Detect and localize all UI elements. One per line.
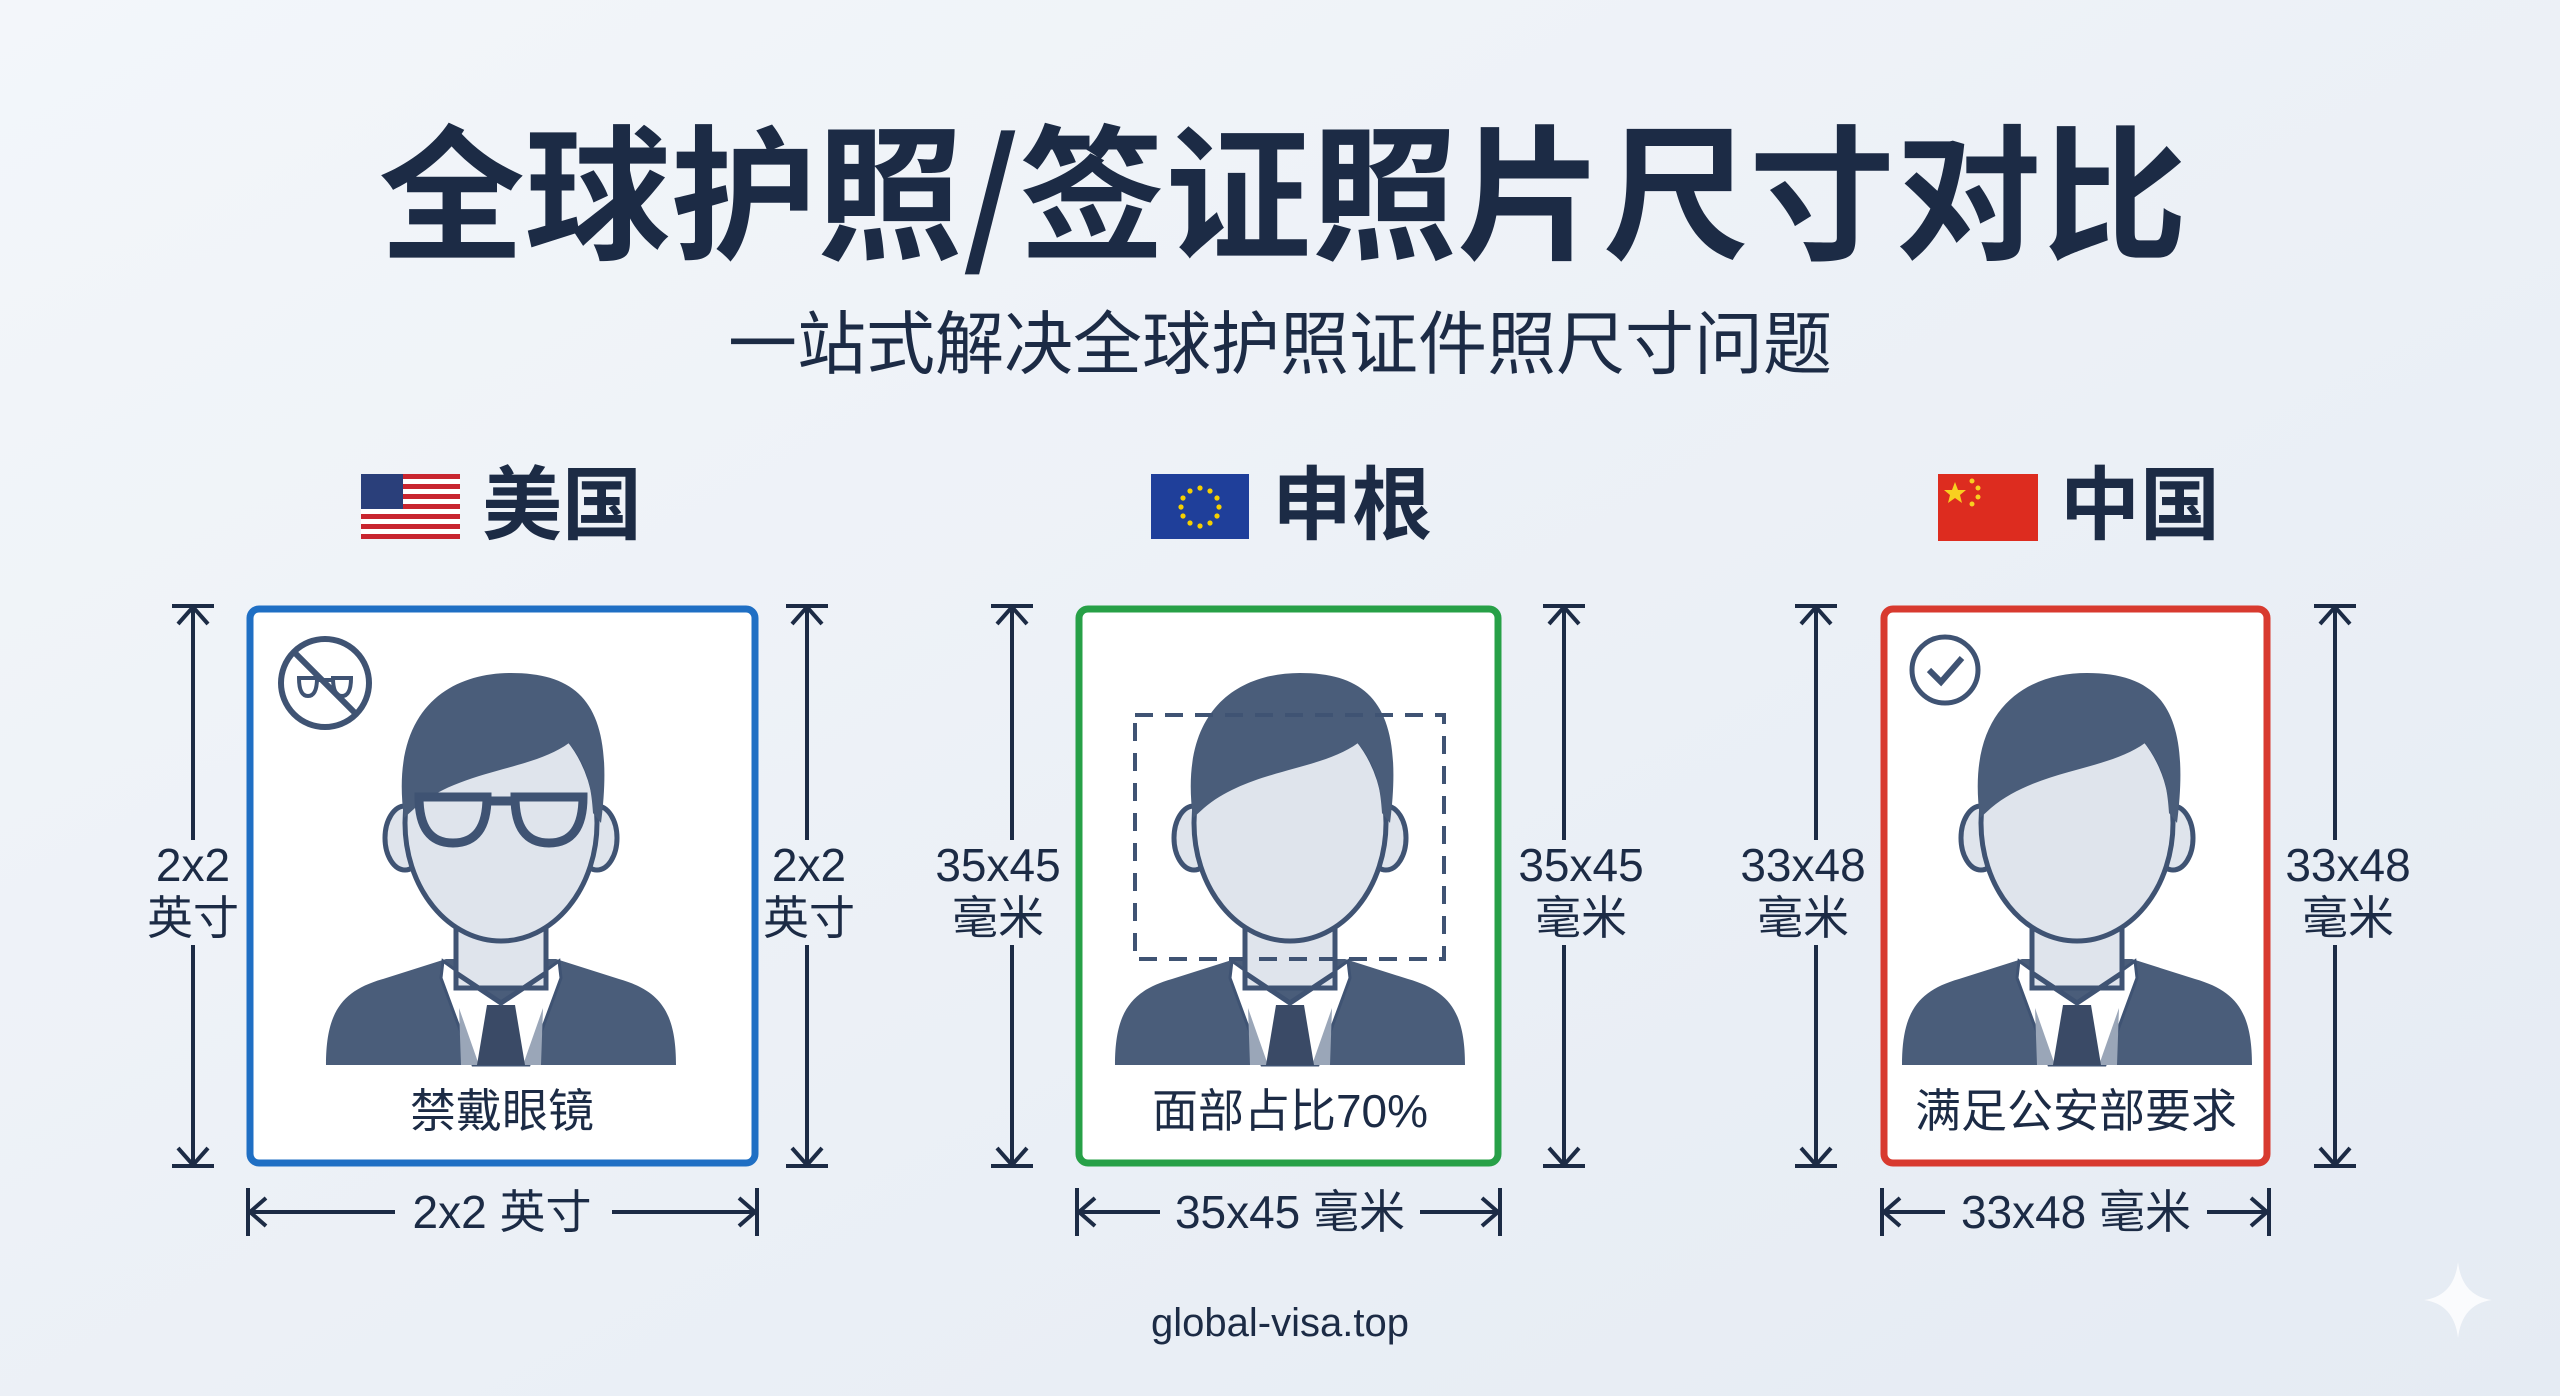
label: Schengen height xyxy=(935,839,1644,944)
heading: Schengen: 申根 xyxy=(1272,441,1432,557)
dimension: China width xyxy=(1882,1186,2269,1238)
label: China height: 毫米 xyxy=(1757,892,1849,944)
heading: Schengen xyxy=(1151,441,1432,557)
person xyxy=(1902,673,2252,1065)
caption: 面部占比70% xyxy=(1152,1085,1428,1137)
dimension: Schengen width xyxy=(1077,1186,1500,1238)
person with glasses xyxy=(326,673,676,1065)
icon: no glasses xyxy=(281,639,369,727)
panel: Schengen photo xyxy=(1079,609,1498,1163)
label: USA height: 2x2 xyxy=(156,839,230,891)
label: China height: 33x48 xyxy=(1740,839,1866,891)
label: China height: 33x48 xyxy=(2285,839,2411,891)
label: Schengen height: 毫米 xyxy=(952,892,1044,944)
label: China height xyxy=(1740,839,2411,944)
subtitle: 一站式解决全球护照证件照尺寸问题 xyxy=(728,288,1832,388)
title: 全球护照/签证照片尺寸对比 xyxy=(379,80,2187,291)
footer url: global-visa.top xyxy=(1151,1301,1409,1345)
dimension: Schengen height xyxy=(991,606,1585,1166)
heading: USA: 美国 xyxy=(482,441,642,557)
label: USA height xyxy=(147,839,855,944)
icon: EU flag xyxy=(1151,474,1249,539)
dimension: Schengen width: 35x45 毫米 xyxy=(1175,1186,1405,1238)
dimension: USA height xyxy=(172,606,828,1166)
heading: China: 中国 xyxy=(2060,441,2220,557)
heading: USA xyxy=(361,441,642,557)
label: USA height: 2x2 xyxy=(772,839,846,891)
heading: China xyxy=(1938,441,2220,557)
icon: sparkle xyxy=(2424,1262,2492,1338)
label: Schengen height: 毫米 xyxy=(1535,892,1627,944)
person xyxy=(1115,673,1465,1065)
caption: 满足公安部要求 xyxy=(1915,1085,2237,1137)
dimension: USA width xyxy=(248,1186,757,1238)
label: China height: 毫米 xyxy=(2302,892,2394,944)
label: Schengen height: 35x45 xyxy=(935,839,1061,891)
icon: check xyxy=(1912,637,1978,703)
label: USA height: 英寸 xyxy=(763,892,855,944)
label: USA height: 英寸 xyxy=(147,892,239,944)
icon: China flag xyxy=(1938,474,2038,541)
dimension: China width: 33x48 毫米 xyxy=(1961,1186,2191,1238)
panel: China photo xyxy=(1884,609,2267,1163)
dimension: USA width: 2x2 英寸 xyxy=(413,1186,591,1238)
label: Schengen height: 35x45 xyxy=(1518,839,1644,891)
panel: USA photo xyxy=(250,609,755,1163)
icon: US flag xyxy=(361,474,460,539)
dimension: China height xyxy=(1795,606,2356,1166)
face frame dashed xyxy=(1135,715,1444,959)
caption: 禁戴眼镜 xyxy=(410,1085,594,1137)
